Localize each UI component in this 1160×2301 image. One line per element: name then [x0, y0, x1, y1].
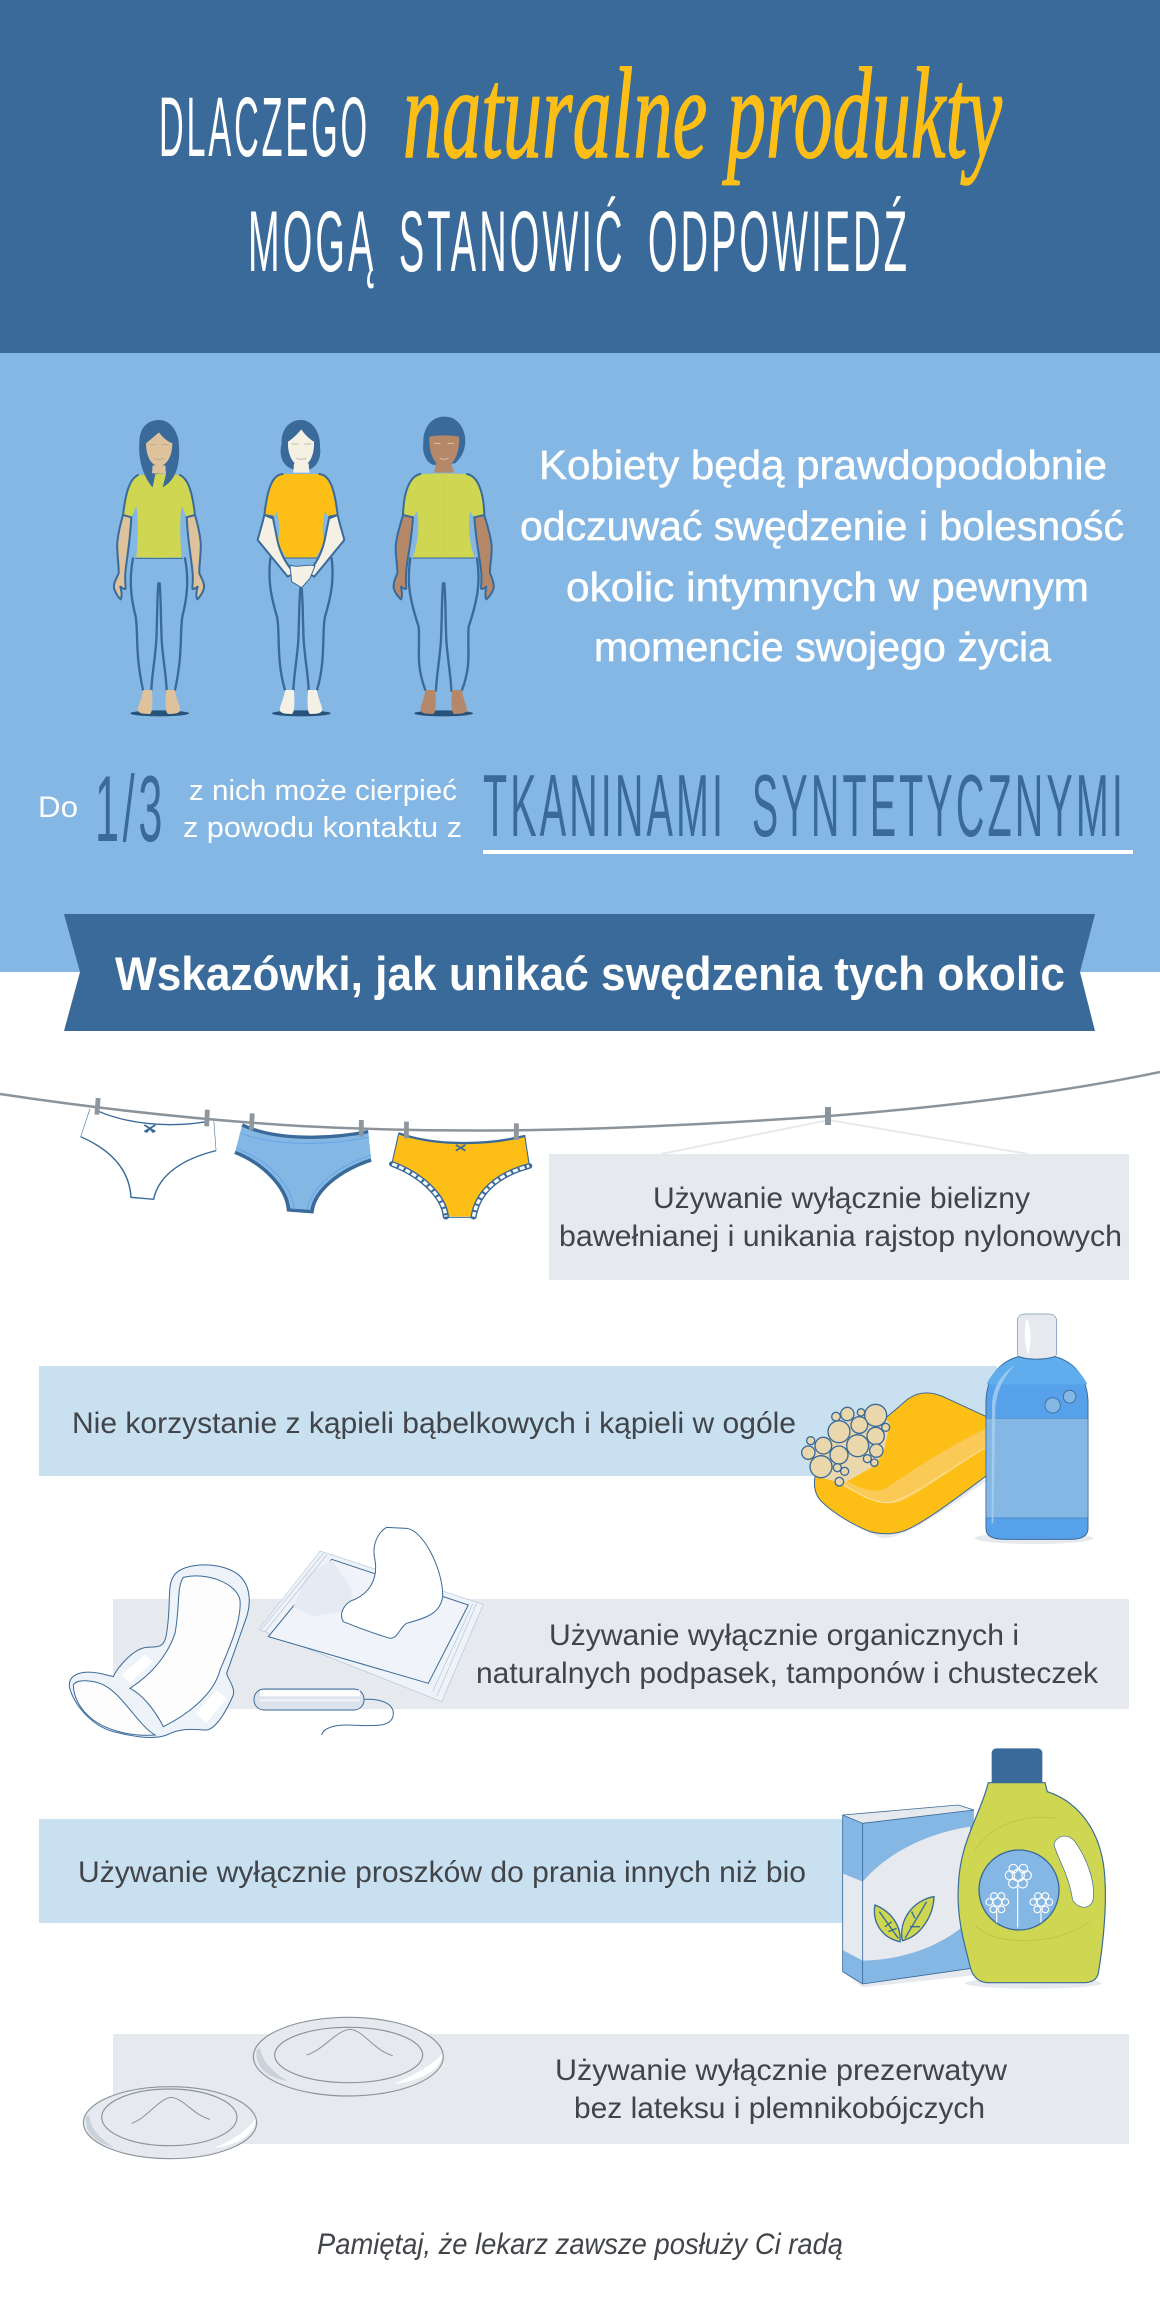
- panel: tip 1 cotton underwear: bawełnianej i unikania rajstop nylonowych: [559, 1220, 1122, 1253]
- text: statistic description: z powodu kontaktu z: [183, 812, 462, 844]
- banner: tips heading: Wskazówki, jak unikać swędzenia tych okolic: [115, 947, 1065, 1000]
- text block: women intro statement: [520, 442, 1124, 670]
- bottle: [975, 1314, 1093, 1544]
- panel: tip 2 bubble baths: [39, 1366, 997, 1476]
- panel: light blue intro section: [0, 353, 1160, 972]
- clothes pegs: [94, 1098, 519, 1140]
- panel: tip 4 bio detergents: Używanie wyłącznie proszków do prania innych niż bio: [78, 1856, 806, 1889]
- panel: tip 3 organic hygiene products: naturalnych podpasek, tamponów i chusteczek: [476, 1657, 1099, 1690]
- illustration: soap and bath bottle: [802, 1314, 1093, 1544]
- underwear: yellow with lace: [392, 1133, 529, 1217]
- peg on line: [825, 1107, 831, 1125]
- panel: title header: DLACZEGO: [159, 80, 370, 174]
- underwear: blue: [235, 1124, 371, 1212]
- statistic: up to one third: 1/3: [95, 756, 166, 861]
- panel: tip 1 cotton underwear: [549, 1120, 1129, 1280]
- woman 3: [394, 417, 494, 716]
- woman 1: [114, 420, 204, 716]
- text block: women intro statement: okolic intymnych w pewnym: [566, 564, 1089, 610]
- panel: tip 5 condoms: Używanie wyłącznie prezerwatyw: [555, 2054, 1007, 2087]
- soap bar: [802, 1393, 990, 1538]
- statistic: up to one third: [38, 756, 1133, 861]
- panel: title header: [0, 0, 1160, 353]
- illustration: washing powder box and detergent jug: [843, 1748, 1105, 1989]
- text block: women intro statement: odczuwać swędzenie i bolesność: [520, 503, 1124, 549]
- illustration: two condoms: [83, 2017, 443, 2159]
- illustration: pad, wipes and tampon: [69, 1527, 483, 1737]
- condom small: [83, 2087, 257, 2159]
- panel: tip 3 organic hygiene products: [113, 1599, 1129, 1709]
- tampon: [254, 1689, 393, 1735]
- footer note: Pamiętaj, że lekarz zawsze posłuży Ci radą: [317, 2228, 843, 2261]
- detergent jug: [958, 1748, 1105, 1989]
- text block: women intro statement: momencie swojego życia: [594, 624, 1051, 670]
- banner: tips heading: [64, 914, 1095, 1031]
- panel: tip 1 cotton underwear: Używanie wyłącznie bielizny: [653, 1182, 1030, 1215]
- text: statistic description: z nich może cierpieć: [189, 775, 457, 807]
- underwear: white: [81, 1109, 216, 1199]
- text: statistic description: [183, 775, 462, 844]
- illustration: three women: [114, 417, 494, 716]
- wipes packet: [259, 1527, 483, 1702]
- flowers: [986, 1864, 1053, 1927]
- underline stroke: [483, 850, 1133, 854]
- panel: tip 5 condoms: bez lateksu i plemnikobójczych: [574, 2092, 985, 2125]
- panel: tip 5 condoms: [113, 2034, 1129, 2144]
- clothesline: [0, 1072, 1160, 1131]
- woman 2: [258, 420, 344, 716]
- panel: tip 3 organic hygiene products: Używanie wyłącznie organicznych i: [549, 1619, 1019, 1652]
- powder box: [843, 1805, 977, 1987]
- panel: tip 4 bio detergents: [39, 1819, 869, 1923]
- illustration: clothesline with underwear: [0, 1072, 1160, 1217]
- label: Do: Do: [38, 791, 78, 824]
- sanitary pad: [69, 1565, 249, 1737]
- leaves icon: [874, 1897, 934, 1942]
- text block: women intro statement: Kobiety będą prawdopodobnie: [539, 442, 1107, 488]
- soap foam bubbles: [802, 1404, 890, 1486]
- panel: tip 2 bubble baths: Nie korzystanie z kąpieli bąbelkowych i kąpieli w ogóle: [72, 1407, 796, 1440]
- condom large: [253, 2017, 443, 2096]
